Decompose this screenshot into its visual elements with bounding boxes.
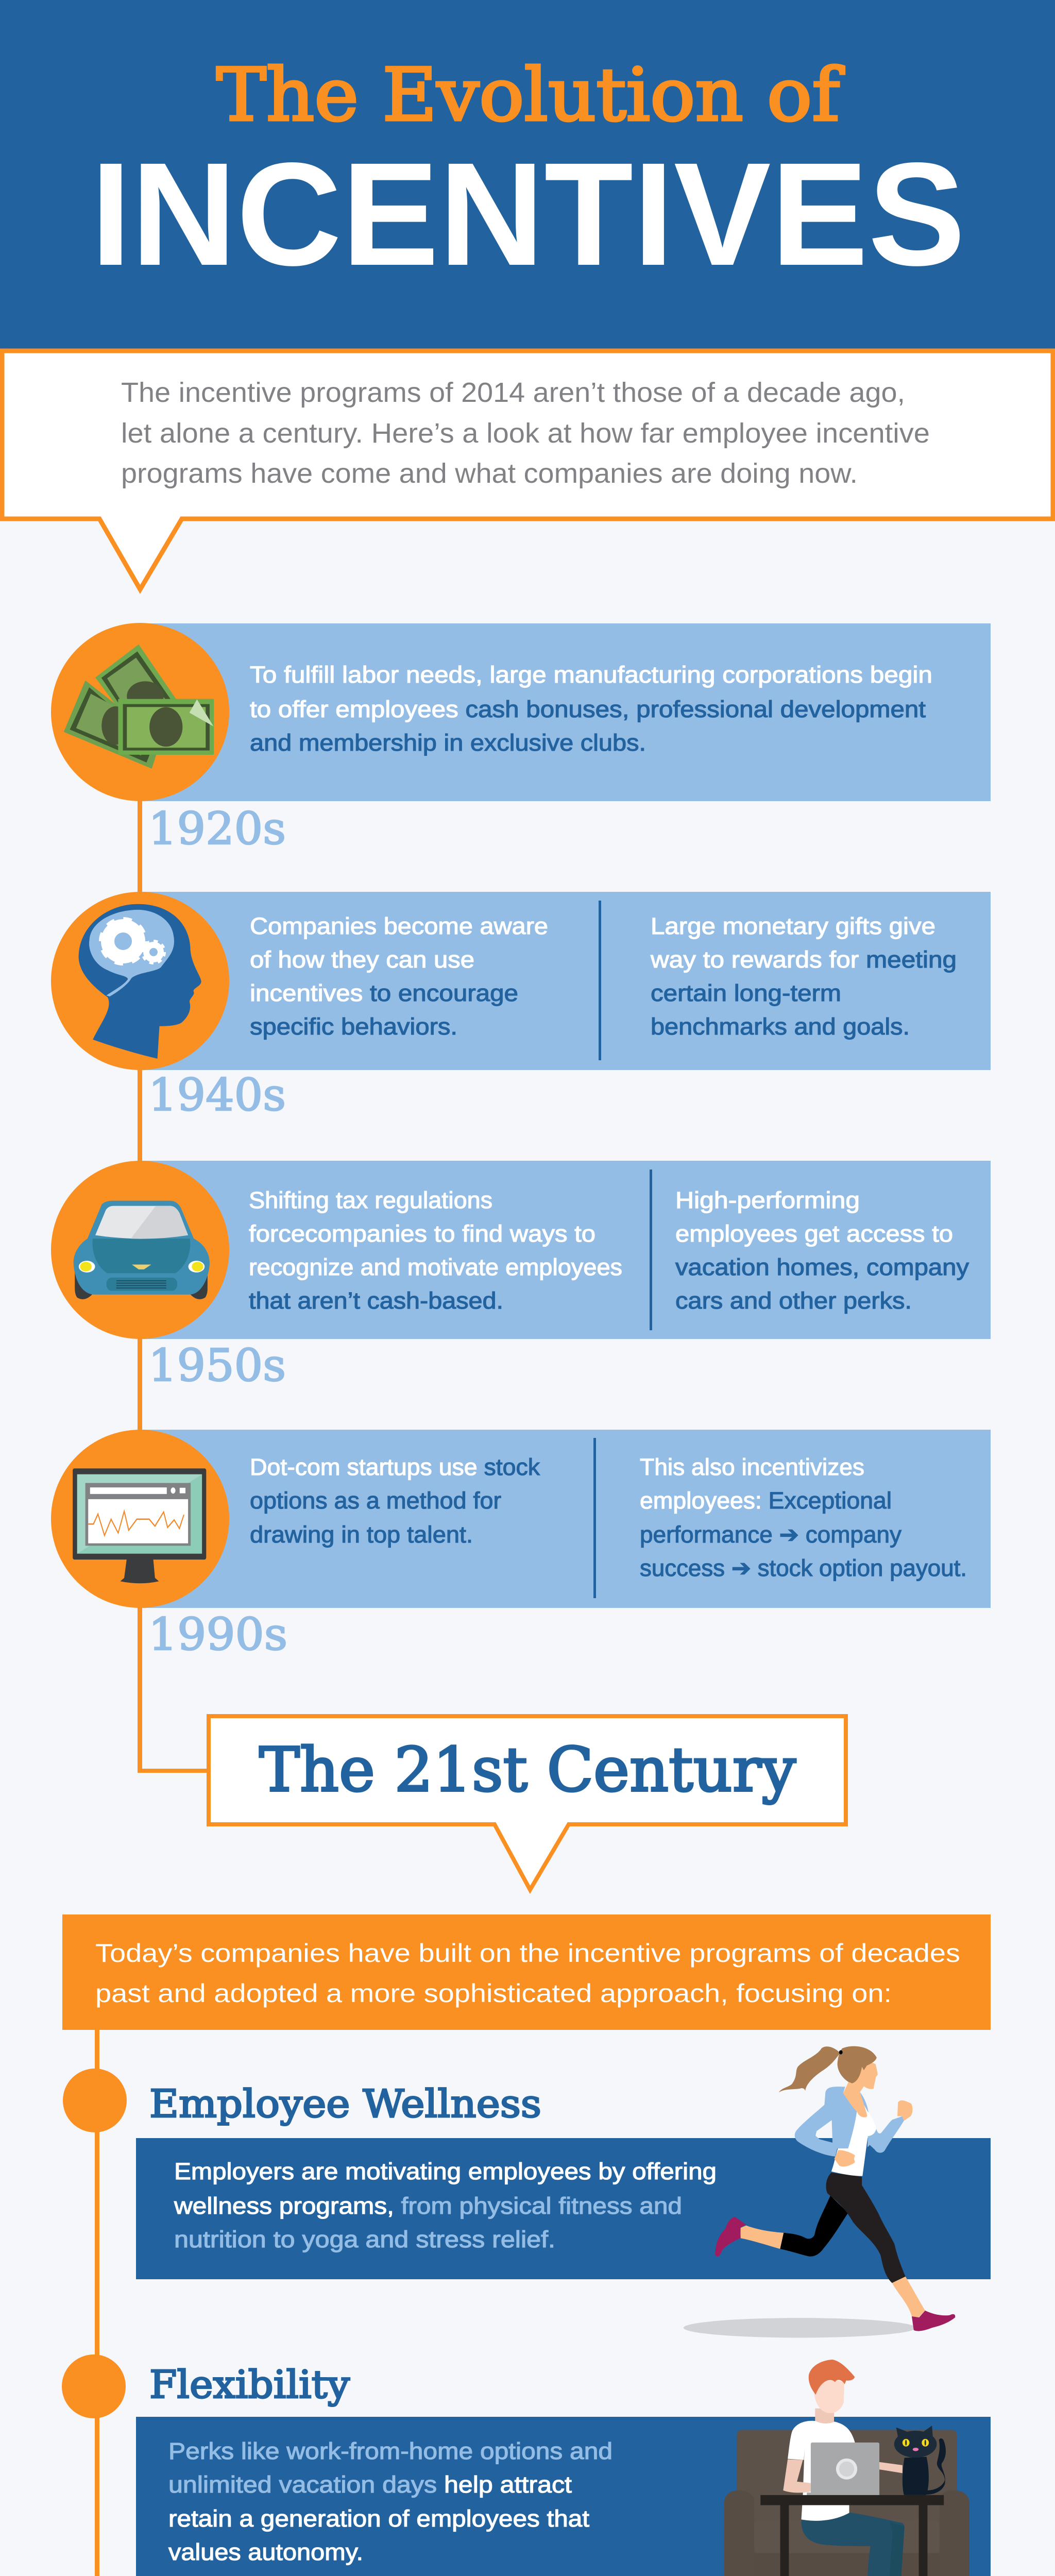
illustration: man with laptop and cat on sofa [696, 2360, 992, 2576]
orange panel text: Today’s companies have built on the incentive programs of decades [95, 1939, 960, 1968]
orange panel text [95, 1939, 960, 2008]
text: 1990s left [250, 1454, 540, 1548]
text: 1940s right: way to rewards for meeting [650, 946, 957, 973]
wellness text: Employers are motivating employees by offering [174, 2158, 717, 2184]
text: 1920s: To fulfill labor needs, large manufacturing corporations begin [250, 662, 932, 688]
text: 1950s right: vacation homes, company [675, 1254, 969, 1280]
text: 1950s left [249, 1187, 622, 1314]
flexibility text: unlimited vacation days help attract [168, 2471, 572, 2498]
text: 1940s left: Companies become aware [250, 913, 548, 939]
year: 1920s: 1920s [148, 803, 286, 855]
icon: head with gears [51, 892, 229, 1070]
panel: 1950s [51, 1161, 991, 1339]
intro speech bubble [2, 351, 1053, 589]
panel: 1940s [51, 892, 991, 1070]
icon: monitor with chart [51, 1430, 229, 1608]
text: 1990s right: This also incentivizes [640, 1454, 864, 1480]
wellness text: nutrition to yoga and stress relief. [174, 2226, 555, 2252]
text: 1940s right: Large monetary gifts give [651, 913, 935, 939]
text: 1920s: to offer employees cash bonuses, professional development [250, 696, 926, 722]
text: 1950s right: employees get access to [675, 1221, 953, 1247]
intro text: let alone a century. Here’s a look at how far employee incentive [121, 418, 930, 449]
flexibility text: retain a generation of employees that [168, 2505, 590, 2532]
text: 1990s left: options as a method for [250, 1487, 501, 1514]
text: 1950s left: forcecompanies to find ways to [249, 1221, 595, 1247]
flexibility text: values autonomy. [168, 2539, 363, 2565]
timeline connector [138, 712, 208, 1773]
heading: Flexibility [149, 2363, 350, 2407]
heading: Employee Wellness [149, 2082, 541, 2126]
text: 1940s left: incentives to encourage [250, 980, 518, 1006]
intro text [121, 377, 930, 489]
blue panel [136, 2138, 991, 2279]
text: 1990s right [640, 1454, 967, 1581]
intro text: The incentive programs of 2014 aren’t those of a decade ago, [121, 377, 905, 408]
orange intro panel [62, 1914, 991, 2030]
section: Flexibility [62, 2354, 992, 2576]
text: 1950s left: recognize and motivate employees [249, 1254, 622, 1280]
text: 1940s left [250, 913, 548, 1040]
header banner [0, 0, 1055, 349]
text: 1920s [250, 662, 932, 756]
orange panel text: past and adopted a more sophisticated approach, focusing on: [95, 1979, 892, 2008]
illustration: runner [684, 2046, 955, 2337]
text: 1990s right: employees: Exceptional [640, 1487, 892, 1514]
wellness text [174, 2158, 717, 2252]
intro text: programs have come and what companies are doing now. [121, 458, 858, 489]
wellness text: wellness programs, from physical fitness and [174, 2193, 682, 2219]
heading bubble: The 21st Century [209, 1716, 846, 1890]
text: 1990s right: success ➔ stock option payout. [640, 1555, 967, 1581]
text: 1990s right: performance ➔ company [640, 1521, 901, 1548]
text: 1920s: and membership in exclusive clubs. [250, 730, 646, 756]
year: 1950s: 1950s [148, 1340, 286, 1392]
bullet [63, 2069, 127, 2132]
bullet [62, 2354, 126, 2418]
panel: 1990s [51, 1430, 991, 1608]
text: 1950s right: High-performing [675, 1187, 860, 1213]
panel: 1920s [51, 623, 991, 801]
text: 1940s right: certain long-term [651, 980, 841, 1006]
text: 1950s right [675, 1187, 969, 1314]
year: 1940s: 1940s [148, 1070, 286, 1121]
text: 1940s left: specific behaviors. [250, 1013, 457, 1040]
text: 1950s left: that aren’t cash-based. [249, 1287, 503, 1314]
title: The Evolution of: The Evolution of [216, 53, 844, 138]
text: 1940s right: benchmarks and goals. [651, 1013, 910, 1040]
flexibility text: Perks like work-from-home options and [168, 2438, 612, 2464]
text: 1940s right [650, 913, 957, 1040]
title: INCENTIVES: INCENTIVES [91, 132, 965, 296]
heading text: The 21st Century [259, 1734, 796, 1805]
text: 1950s right: cars and other perks. [675, 1287, 912, 1314]
second timeline connector [95, 2030, 1055, 2576]
blue panel [136, 2417, 991, 2576]
year: 1990s: 1990s [148, 1609, 287, 1660]
section: Employee Wellness [63, 2046, 991, 2337]
text: 1950s left: Shifting tax regulations [249, 1187, 492, 1213]
icon: money bills [51, 623, 229, 801]
flexibility text [168, 2438, 612, 2565]
text: 1990s left: drawing in top talent. [250, 1521, 473, 1548]
icon: car [51, 1161, 229, 1339]
text: 1940s left: of how they can use [250, 946, 474, 973]
text: 1990s left: Dot-com startups use stock [250, 1454, 540, 1480]
